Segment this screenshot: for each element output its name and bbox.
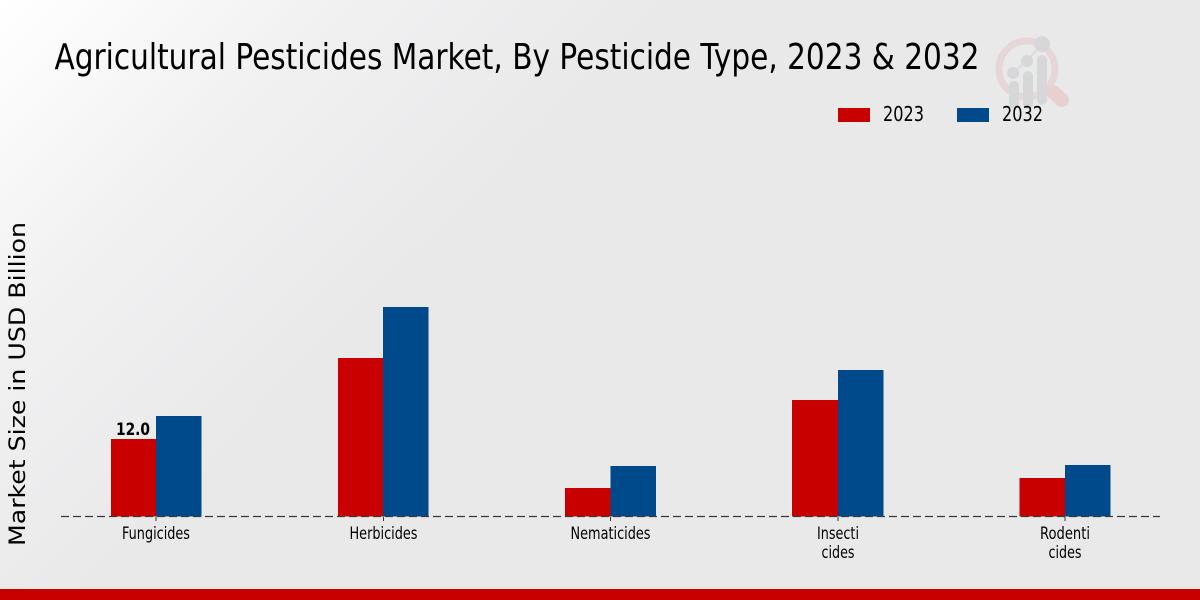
label: Nematicides: Nematicides [570,524,650,543]
label: Rodenticides: Rodenti [1040,524,1090,543]
x axis labels [122,524,1090,562]
bars: Rodenticides [1020,465,1110,516]
bars: Fungicides [111,416,202,516]
title: Agricultural Pesticides Market, By Pesticide Type, 2023 & 2032 [54,37,980,78]
label: Insecticides: Insecti [817,524,859,543]
label: Rodenticides [1040,524,1090,562]
y axis label: Market Size in USD Billion [5,222,31,546]
bars: Herbicides [338,307,428,516]
bars: Insecticides [792,370,884,516]
label: Insecticides: cides [822,543,854,562]
label: Insecticides [817,524,859,562]
footer bar [0,589,1200,600]
data label: 12.0: 12.0 [116,420,150,439]
baseline [61,516,1160,518]
legend item: 2032: 2032 [1002,102,1043,126]
label: Fungicides: Fungicides [122,524,190,543]
label: Herbicides: Herbicides [350,524,418,543]
legend item: 2023: 2023 [883,102,924,126]
legend item: 2023 [838,102,924,126]
legend item: 2032 [957,102,1043,126]
icon: watermark logo [999,36,1062,109]
legend [838,102,1043,126]
label: Rodenticides: cides [1048,543,1082,562]
bars: Nematicides [565,466,656,516]
bar chart [61,307,1160,562]
